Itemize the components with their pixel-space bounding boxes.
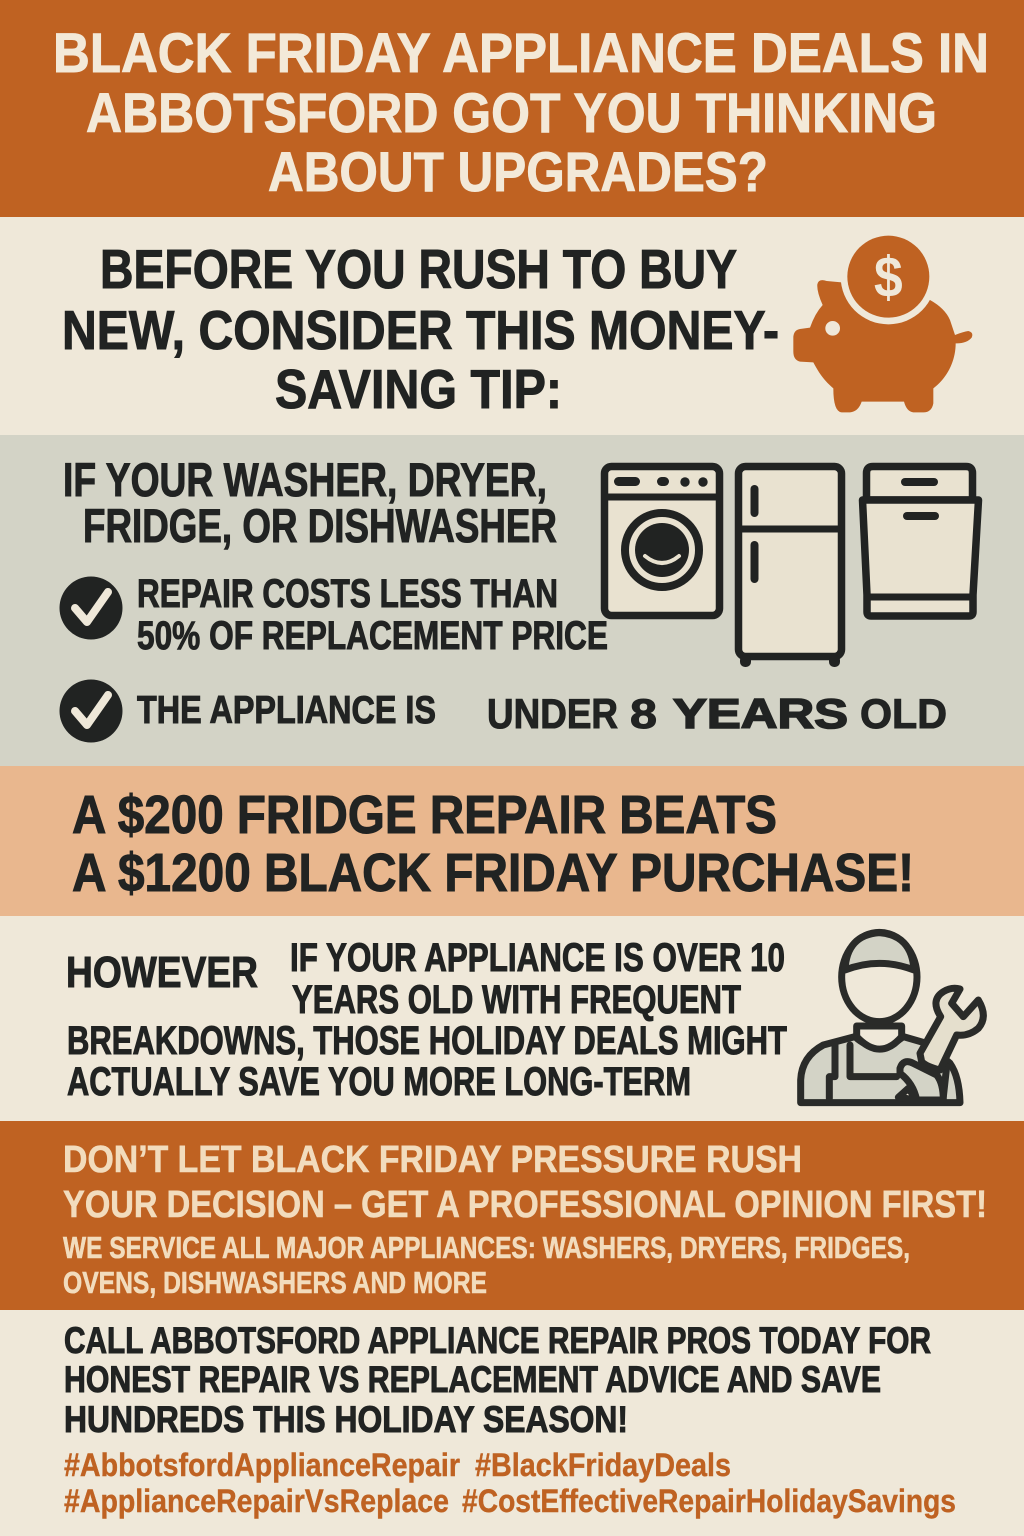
panel: repair checklist	[0, 435, 1024, 766]
title: ABOUT UPGRADES?	[268, 140, 768, 203]
hashtags: #AbbotsfordApplianceRepair	[64, 1447, 460, 1483]
icon: washer	[604, 466, 720, 616]
heading: money-saving tip	[62, 238, 779, 420]
heading: money-saving tip: NEW, CONSIDER THIS MONEY-	[62, 299, 779, 361]
text block: when to replace: IF YOUR APPLIANCE IS OVER 10	[290, 936, 785, 980]
text block: when to replace: ACTUALLY SAVE YOU MORE LONG-TERM	[67, 1060, 691, 1104]
heading: money-saving tip: BEFORE YOU RUSH TO BUY	[100, 238, 737, 300]
hashtags: #CostEffectiveRepairHolidaySavings	[462, 1483, 956, 1519]
icon: repair technician with wrench	[801, 932, 983, 1103]
checklist item: appliance age: 8	[630, 690, 657, 737]
heading: professional opinion: DON’T LET BLACK FRIDAY PRESSURE RUSH	[63, 1139, 802, 1181]
icon: piggy bank with coin: $	[874, 246, 903, 310]
callout: repair beats purchase: A $200 FRIDGE REPAIR BEATS	[72, 785, 777, 845]
heading: appliance types: IF YOUR WASHER, DRYER,	[63, 453, 547, 506]
panel: title banner	[0, 0, 1024, 217]
checklist item: appliance age: UNDER	[487, 690, 618, 737]
hashtags: #BlackFridayDeals	[475, 1447, 731, 1483]
panel: repair example banner	[0, 766, 1024, 916]
hashtags	[64, 1447, 956, 1519]
checklist item: appliance age: OLD	[860, 690, 947, 737]
heading: appliance types: FRIDGE, OR DISHWASHER	[83, 499, 557, 552]
panel: contact and hashtags	[0, 1310, 1024, 1536]
text block: services	[63, 1230, 910, 1300]
checklist item: repair cost: 50% OF REPLACEMENT PRICE	[137, 614, 608, 658]
text block: when to replace: HOWEVER	[66, 948, 258, 997]
panel: professional opinion call to action	[0, 1121, 1024, 1310]
checklist item: repair cost	[60, 572, 608, 658]
icon: fridge	[738, 466, 842, 667]
checklist item: appliance age: THE APPLIANCE IS	[137, 689, 436, 732]
checklist item: appliance age	[60, 680, 947, 742]
panel: money-saving tip	[0, 217, 1024, 435]
icon: dishwasher	[862, 466, 978, 616]
checklist item: appliance age: YEARS	[673, 690, 848, 737]
heading: money-saving tip: SAVING TIP:	[275, 358, 562, 420]
callout: repair beats purchase: A $1200 BLACK FRIDAY PURCHASE!	[72, 843, 914, 903]
panel: however note	[0, 916, 1024, 1121]
title: ABBOTSFORD GOT YOU THINKING	[86, 81, 937, 144]
text block: when to replace	[66, 936, 787, 1104]
hashtags: #ApplianceRepairVsReplace	[64, 1483, 449, 1519]
title	[53, 21, 989, 203]
text block: services: OVENS, DISHWASHERS AND MORE	[63, 1265, 487, 1300]
callout: repair beats purchase	[72, 785, 914, 903]
text block: call to action	[64, 1320, 931, 1440]
text block: when to replace: BREAKDOWNS, THOSE HOLIDAY DEALS MIGHT	[67, 1019, 787, 1063]
text block: when to replace: YEARS OLD WITH FREQUENT	[292, 978, 741, 1022]
icon: piggy bank with coin	[793, 229, 972, 412]
heading: appliance types	[63, 453, 557, 552]
heading: professional opinion	[63, 1139, 987, 1226]
checklist item: repair cost: REPAIR COSTS LESS THAN	[137, 572, 558, 616]
text block: call to action: HUNDREDS THIS HOLIDAY SEASON!	[64, 1399, 628, 1440]
